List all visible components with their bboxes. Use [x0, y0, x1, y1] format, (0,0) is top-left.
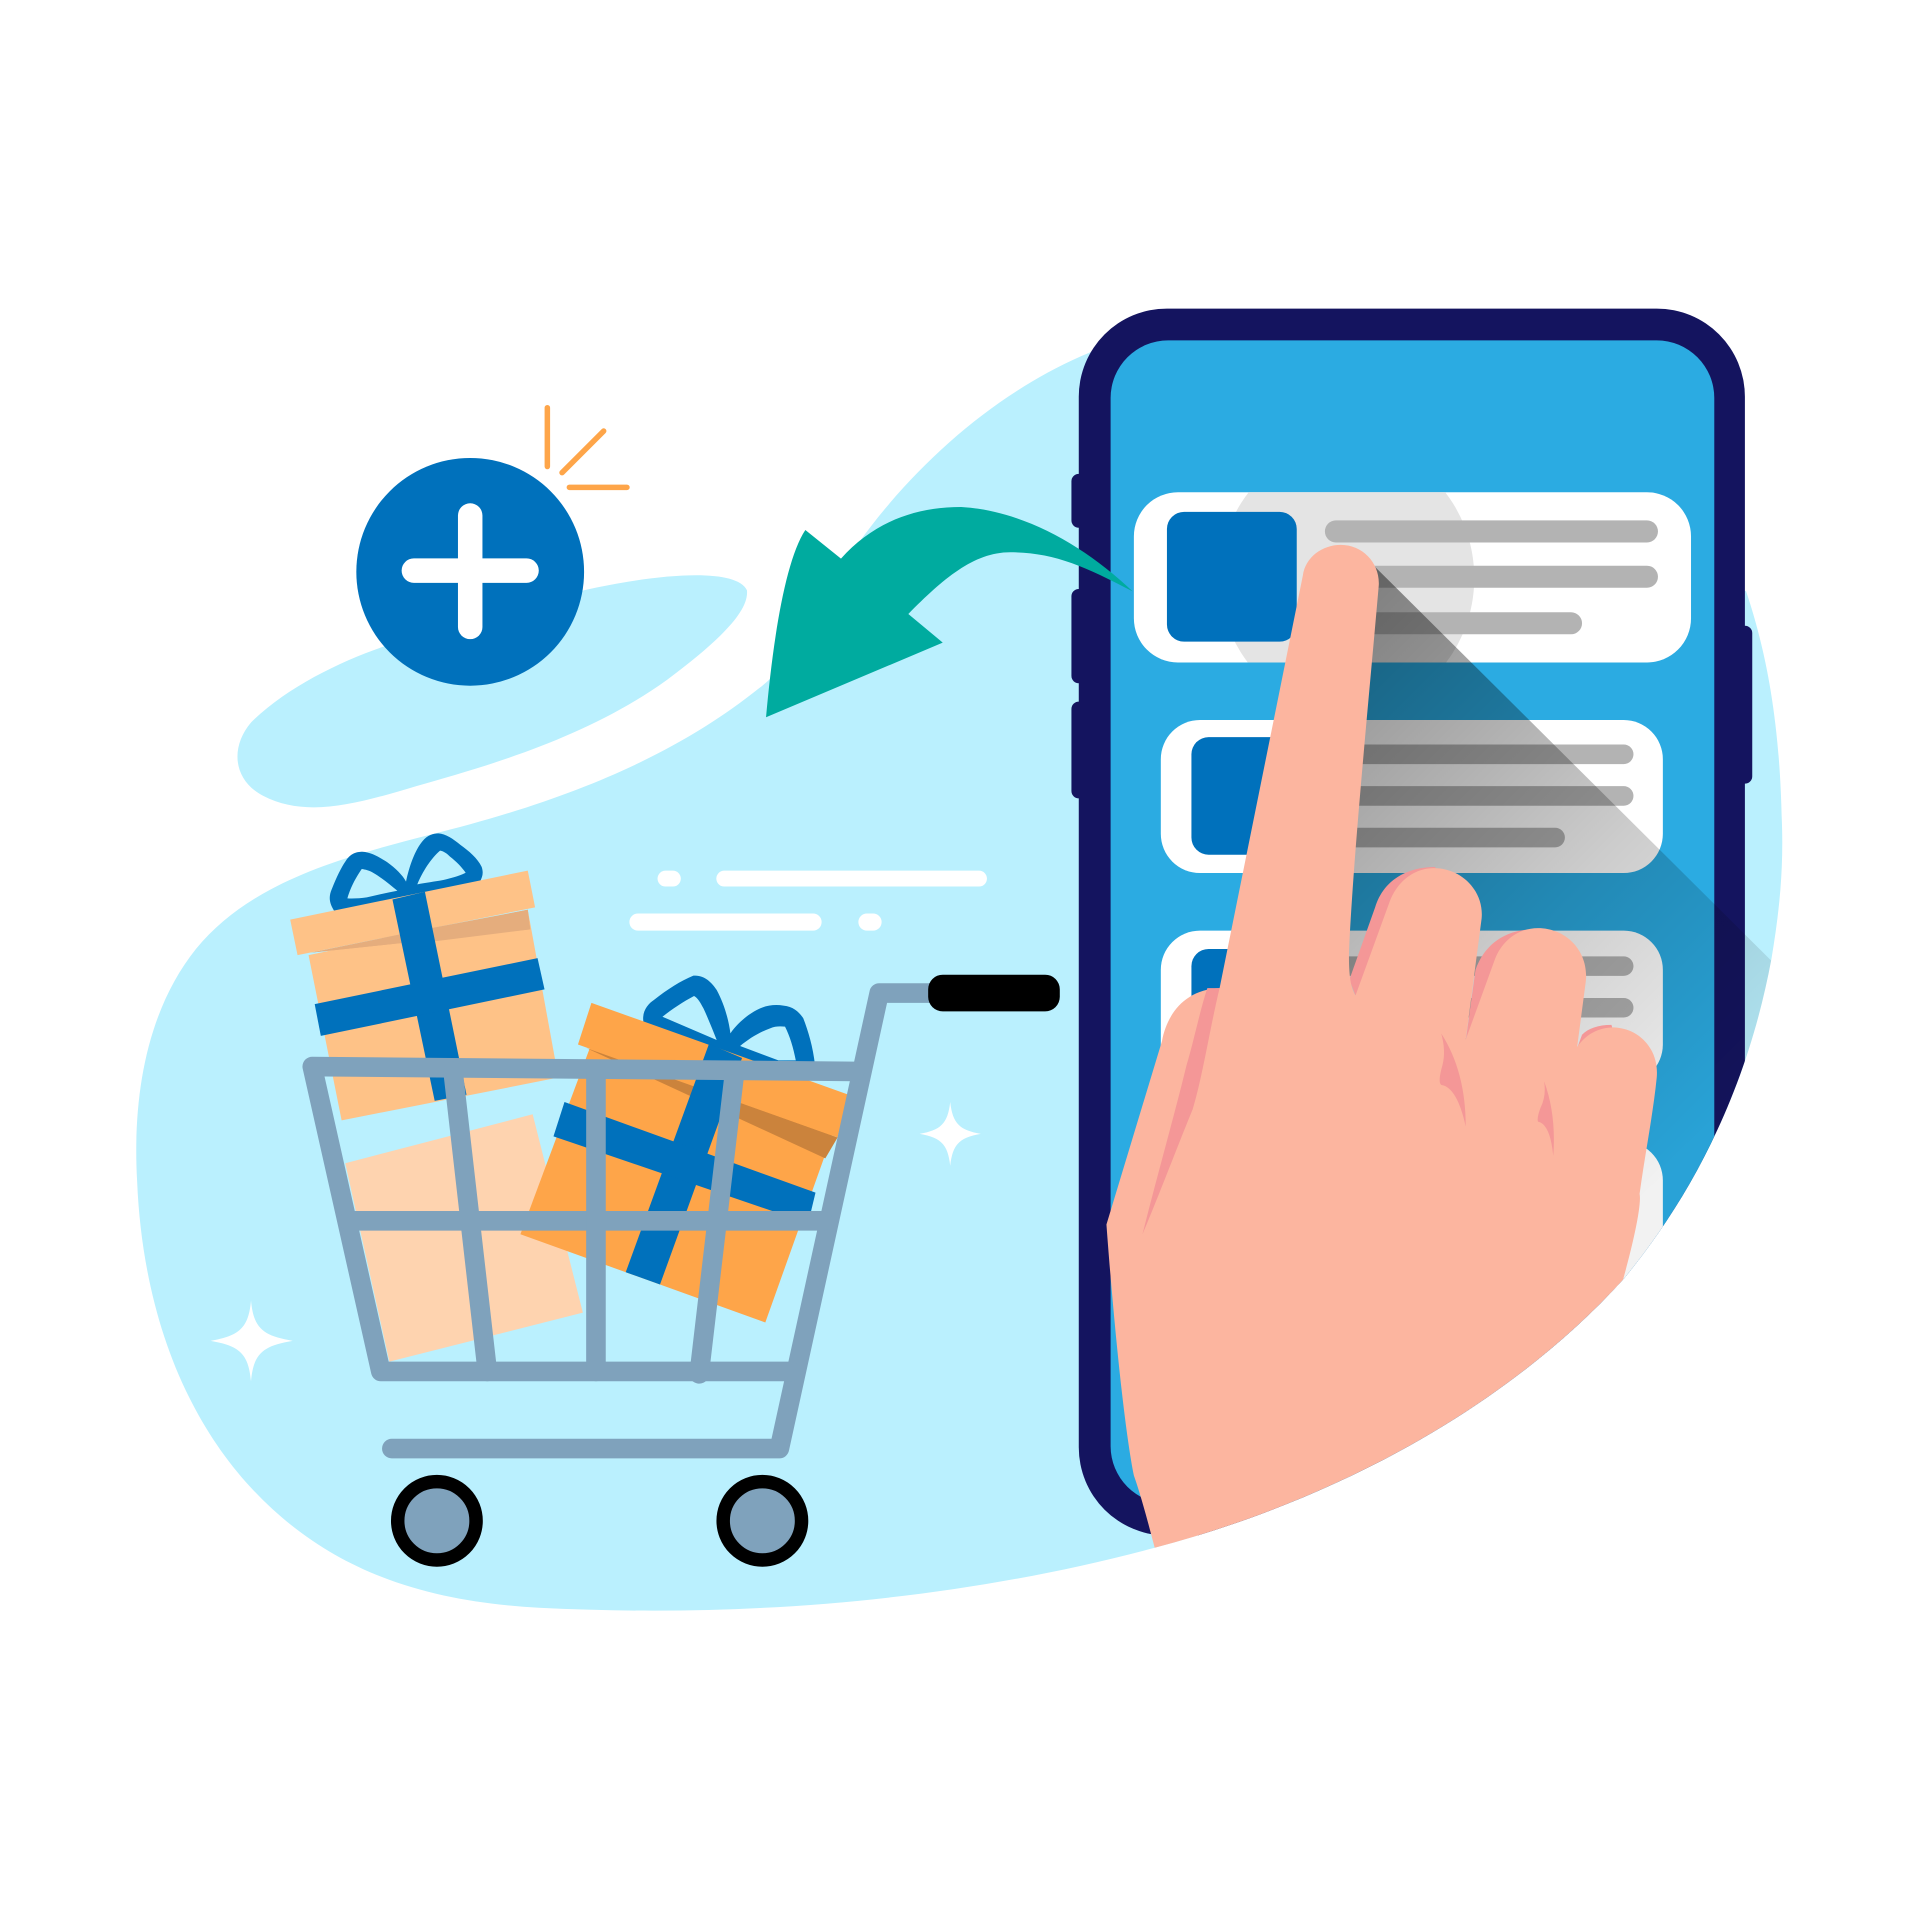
card 4: [1609, 1148, 1663, 1294]
phone screen: [1111, 340, 1714, 1504]
plus badge: [356, 458, 584, 686]
background blob: small: [237, 575, 747, 807]
shopping cart: [312, 975, 1060, 1560]
hand shape: [1106, 545, 1657, 1548]
cart frame: [312, 993, 943, 1449]
gift: orange: [520, 976, 849, 1322]
wheel left: [398, 1482, 476, 1560]
phone body: [1079, 309, 1745, 1536]
finger shading: [1349, 867, 1616, 1053]
illustration: mobile shopping: [136, 308, 1782, 1611]
gift: pale orange: [345, 1114, 583, 1362]
card 2: [1161, 720, 1663, 873]
wheel right: [723, 1482, 802, 1560]
star: left: [211, 1300, 293, 1381]
hand creases: [1142, 988, 1554, 1234]
finger shadow: [1349, 567, 1771, 1278]
card 1: [1134, 492, 1691, 662]
background blob: main: [136, 349, 1782, 1611]
sparkle lines: [547, 408, 627, 487]
hand: [1106, 545, 1657, 1548]
motion dashes: [629, 871, 987, 931]
phone side buttons: [1071, 474, 1752, 798]
phone: [1071, 309, 1772, 1592]
gift: light orange tall: [290, 833, 558, 1120]
arrow: [766, 507, 1133, 717]
star: right: [920, 1102, 981, 1166]
cart handle: [928, 975, 1060, 1011]
card 3: [1160, 930, 1663, 1066]
